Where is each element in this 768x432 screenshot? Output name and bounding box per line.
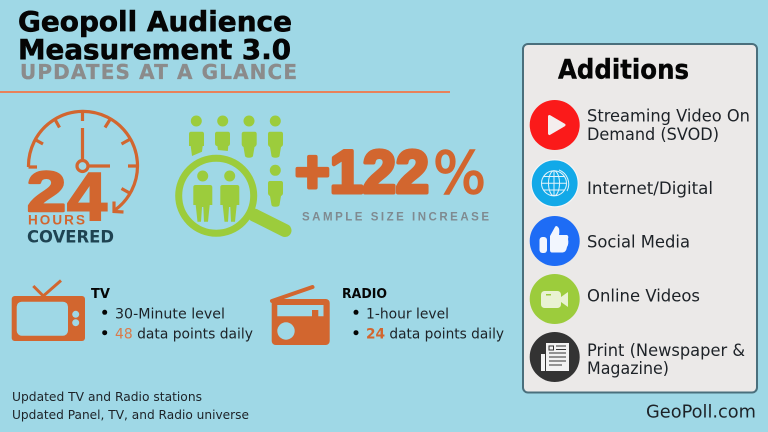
stat: +122%: %	[433, 139, 486, 207]
title: Geopoll Audience	[18, 6, 292, 38]
stat caption: SAMPLE SIZE INCREASE	[302, 212, 489, 224]
label: SVOD: Demand (SVOD)	[587, 125, 719, 144]
icon: video camera	[530, 274, 580, 324]
text block: TV: 30-Minute level	[115, 306, 225, 322]
label: print	[587, 341, 745, 378]
text block: radio: 1-hour level	[366, 306, 449, 322]
icon: TV	[12, 280, 85, 341]
icon: newspaper	[530, 332, 580, 382]
title: Measurement 3.0	[18, 34, 291, 66]
icon: streaming play button	[530, 100, 580, 150]
icon: 24 hours clock	[27, 111, 137, 247]
label: print: Print (Newspaper &	[587, 341, 745, 360]
text block: radio: 24 data points daily	[366, 326, 504, 342]
panel: additions	[523, 44, 757, 392]
icon: people under magnifier	[179, 116, 285, 233]
text block: TV: 48 data points daily	[115, 326, 253, 342]
icon: thumbs up	[530, 216, 580, 266]
footer notes: Updated TV and Radio stations	[12, 390, 202, 404]
text block: radio	[342, 287, 504, 342]
stat: +122%: +122	[295, 138, 429, 206]
footer notes	[12, 390, 249, 422]
text block: TV	[91, 287, 253, 342]
icon: radio	[272, 287, 330, 345]
text block: radio: RADIO	[342, 287, 387, 302]
icon: 24 hours clock: COVERED	[27, 228, 114, 248]
text block: TV: TV	[91, 287, 110, 302]
icon: 24 hours clock: 4	[67, 159, 107, 235]
label: online videos: Online Videos	[587, 287, 700, 306]
stat: +122%	[295, 138, 486, 207]
website: GeoPoll.com	[646, 401, 756, 422]
label: print: Magazine)	[587, 359, 669, 378]
label: SVOD	[587, 107, 750, 144]
icon: 24 hours clock: 2	[27, 160, 66, 224]
icon: globe	[531, 160, 578, 207]
footer notes: Updated Panel, TV, and Radio universe	[12, 408, 249, 422]
label: social media: Social Media	[587, 233, 690, 252]
icon: 24 hours clock: HOURS	[28, 212, 85, 228]
subtitle: UPDATES AT A GLANCE	[20, 60, 297, 84]
panel heading: Additions	[558, 54, 689, 85]
label: SVOD: Streaming Video On	[587, 107, 750, 126]
label: internet: Internet/Digital	[587, 179, 713, 198]
title	[18, 6, 292, 66]
